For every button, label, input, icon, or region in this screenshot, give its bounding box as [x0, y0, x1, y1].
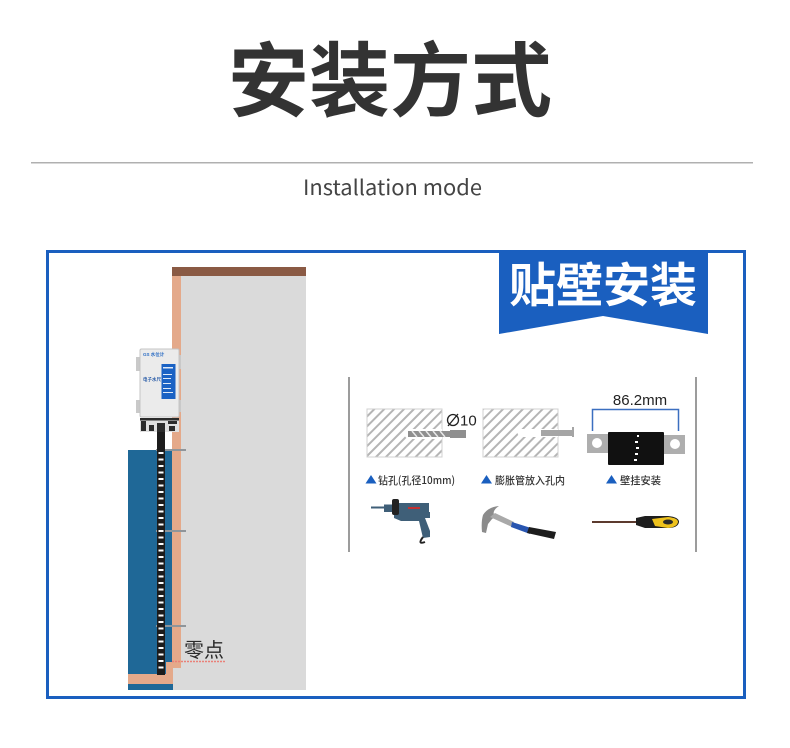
sensor probe strip — [157, 428, 165, 675]
dimension label: 86.2mm — [613, 392, 667, 409]
wall render layer — [128, 276, 181, 684]
step 1: drilling — [366, 409, 477, 488]
mounting ears — [587, 434, 608, 453]
dimension bracket — [592, 410, 678, 431]
wall concrete — [173, 276, 306, 690]
step 3: wall mount — [587, 392, 685, 488]
right rule — [695, 377, 697, 552]
subtitle: Installation mode — [303, 172, 482, 202]
badge: wall mount: 贴壁安装 — [509, 247, 697, 316]
diameter label: 10 — [460, 412, 477, 430]
title: 安装方式 — [228, 17, 552, 134]
step caption: 钻孔(孔径10mm) — [378, 473, 455, 488]
icon: hammer — [482, 506, 556, 539]
device logo: GS 水位计 — [143, 351, 165, 358]
device terminals — [140, 418, 179, 432]
step 3: wall mount: 壁挂安装 — [620, 473, 661, 488]
wall top cap — [172, 267, 306, 276]
device blue panel — [162, 364, 176, 399]
water body — [128, 450, 172, 674]
panel: wall mount frame — [48, 252, 744, 698]
device enclosure — [136, 349, 181, 432]
zero point label: 零点 — [184, 634, 224, 663]
drill bit — [408, 430, 466, 438]
channel bottom water — [128, 684, 173, 690]
step 2: anchor — [481, 409, 574, 488]
icon: screwdriver — [592, 516, 679, 528]
left rule — [348, 377, 350, 552]
zero point line — [172, 660, 226, 662]
expansion anchor — [541, 427, 574, 437]
step 2: anchor: 膨胀管放入孔内 — [495, 473, 565, 488]
black body — [608, 432, 664, 465]
mounting brackets — [156, 449, 186, 627]
device name: 电子水尺 — [143, 376, 161, 383]
icon: electric drill — [371, 499, 430, 543]
wall cross-section diagram — [128, 267, 306, 690]
divider — [31, 162, 753, 164]
